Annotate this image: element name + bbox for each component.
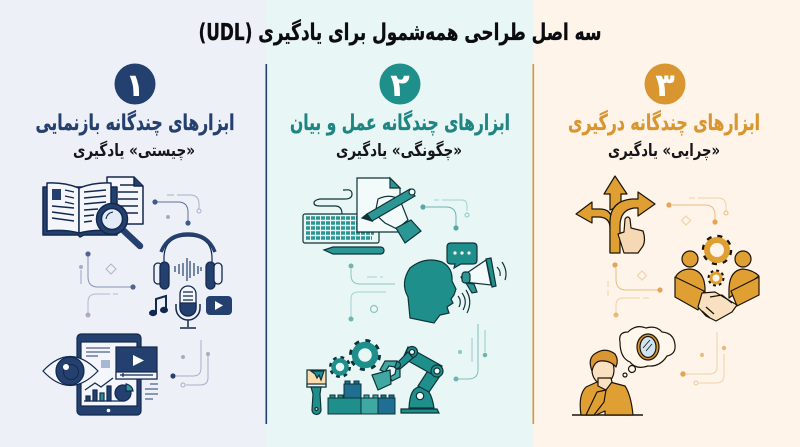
icon: keyboard, paper and pen (303, 178, 421, 254)
connector lines one (79, 195, 210, 387)
icon: robot arm (372, 346, 443, 413)
icon: megaphone (461, 258, 506, 293)
icon: open book with magnifier (43, 177, 143, 246)
icon: tablet with eye and charts (43, 334, 158, 415)
subheading 2: «چگونگی» یادگیری (336, 140, 462, 161)
icon: music note (150, 296, 168, 316)
icon: microphone (176, 286, 200, 328)
icon: paint brush (307, 370, 326, 414)
number badge 2 (380, 64, 420, 104)
icon: speaking head (404, 260, 470, 323)
icon: branching arrows with hand (576, 176, 655, 253)
column 1 header (36, 64, 234, 161)
icon: headphones (154, 234, 222, 289)
column 3 header (568, 64, 760, 161)
icon: gears (332, 342, 378, 376)
heading 1: ابزارهای چندگانه بازنمایی (36, 109, 234, 136)
number badge 3 (644, 64, 686, 104)
connector lines three (608, 198, 728, 385)
subheading 1: «چیستی» یادگیری (73, 140, 195, 161)
icon: team gears and handshake (675, 238, 759, 321)
number badge 2: ۲ (390, 66, 410, 104)
subheading 3: «چرایی» یادگیری (608, 140, 720, 161)
column 2 header (290, 64, 510, 161)
icon: building blocks (328, 381, 395, 414)
icon: video play (206, 296, 232, 315)
icon: thinking person with mirror (572, 327, 675, 415)
panel: background two (266, 0, 533, 447)
panel: background three (533, 0, 800, 447)
heading 2: ابزارهای چندگانه عمل و بیان (290, 109, 510, 136)
number badge 3: ۳ (655, 66, 675, 104)
number badge 1: ۱ (125, 66, 145, 104)
icon: speech bubble (447, 243, 477, 268)
panel: background one (0, 0, 266, 447)
number badge 1 (114, 64, 156, 104)
title: سه اصل طراحی همه‌شمول برای یادگیری (UDL) (198, 19, 602, 46)
connector lines two (348, 200, 487, 382)
